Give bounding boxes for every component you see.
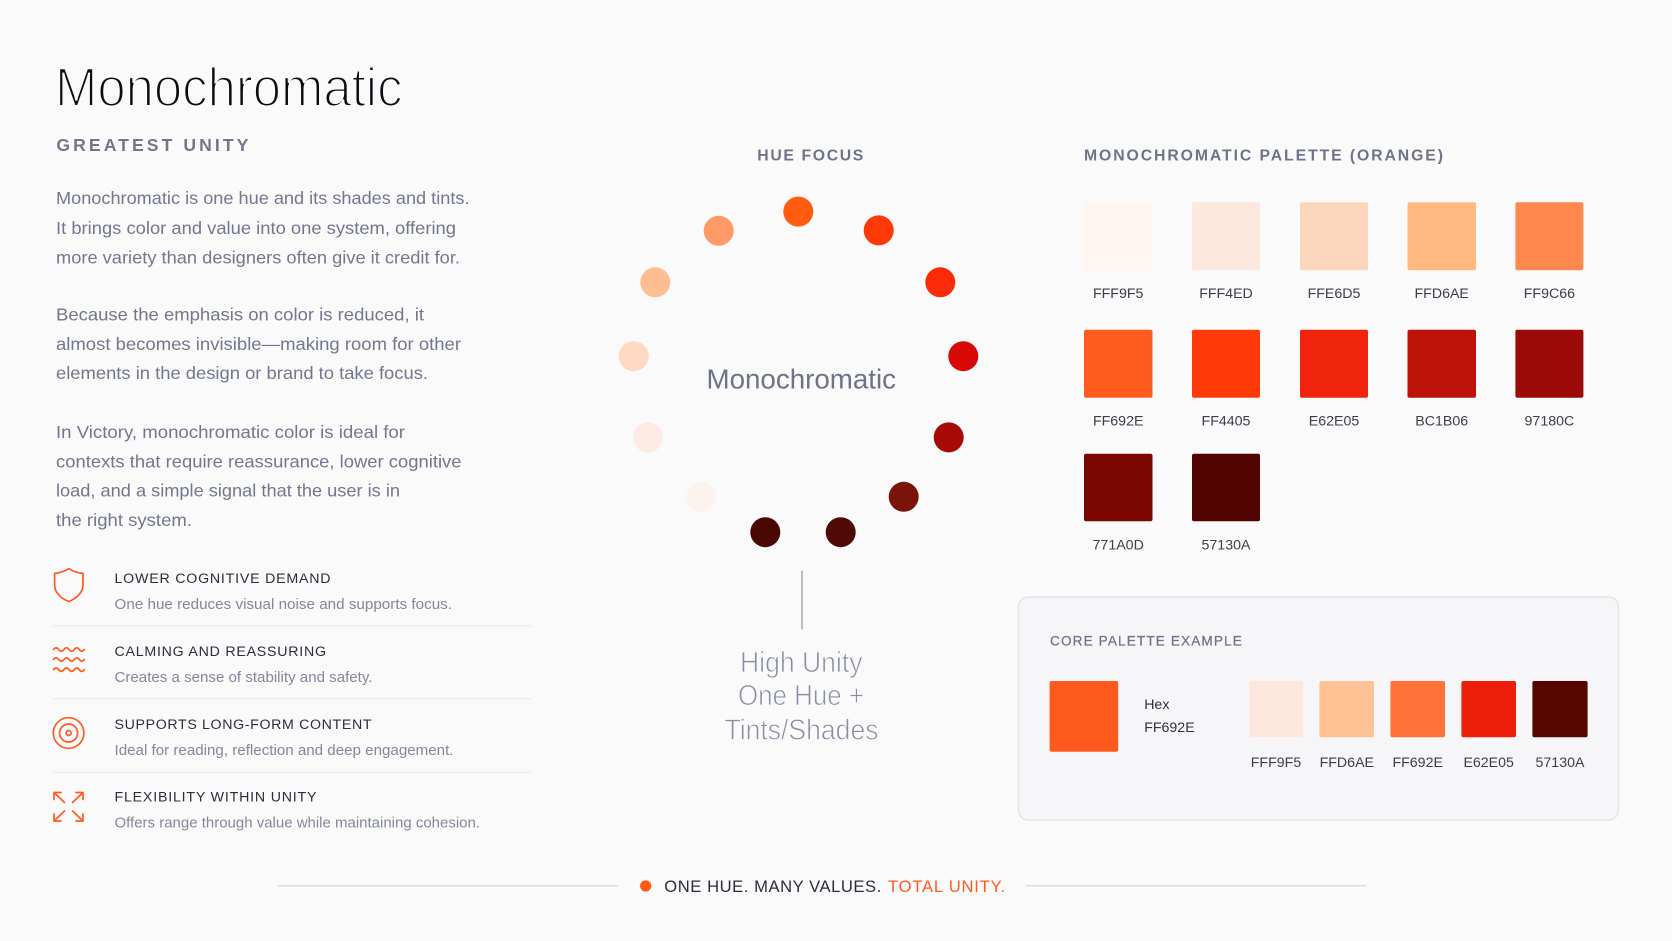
label: primary hex: Hex bbox=[1144, 697, 1169, 713]
paragraph: invisibility bbox=[56, 305, 461, 383]
caption: high unity bbox=[724, 647, 878, 746]
benefit: lower cognitive demand: One hue reduces visual noise and supports focus. bbox=[114, 597, 452, 613]
caption: high unity: Tints/Shades bbox=[724, 714, 878, 746]
panel: palette swatches: 771A0D bbox=[1093, 538, 1144, 554]
panel: core palette example bbox=[1018, 597, 1618, 820]
chart: hue ring bbox=[619, 197, 978, 547]
paragraph: usage in Victory: In Victory, monochromatic color is ideal for bbox=[56, 422, 405, 442]
paragraph: invisibility: Because the emphasis on color is reduced, it bbox=[56, 305, 424, 325]
heading: hue focus: HUE FOCUS bbox=[757, 148, 863, 164]
benefit: supports long-form content: Ideal for reading, reflection and deep engagement. bbox=[114, 743, 454, 759]
swatch row: core palette: E62E05 bbox=[1463, 755, 1514, 771]
panel: palette swatches: FFD6AE bbox=[1414, 286, 1469, 302]
swatch row: core palette: FF692E bbox=[1392, 755, 1443, 771]
benefit: flexibility within unity bbox=[54, 790, 480, 832]
swatch row: core palette: FFD6AE bbox=[1320, 755, 1374, 771]
paragraph: usage in Victory bbox=[56, 422, 462, 530]
paragraph: definition: Monochromatic is one hue and its shades and tints. bbox=[56, 188, 469, 208]
paragraph: usage in Victory: load, and a simple signal that the user is in bbox=[56, 481, 400, 501]
panel: palette swatches: E62E05 bbox=[1309, 414, 1359, 430]
footer text: ONE HUE. MANY VALUES. bbox=[664, 877, 881, 896]
swatch row: core palette bbox=[1249, 681, 1588, 771]
title: Monochromatic bbox=[55, 56, 402, 118]
panel: palette swatches: BC1B06 bbox=[1415, 414, 1468, 430]
panel: palette swatches: FFE6D5 bbox=[1308, 286, 1361, 302]
swatch: primary hue bbox=[1050, 681, 1118, 752]
label: primary hex bbox=[1144, 697, 1195, 736]
panel: palette swatches: FF692E bbox=[1093, 414, 1143, 430]
benefit: supports long-form content: SUPPORTS LONG-FORM CONTENT bbox=[114, 717, 372, 733]
paragraph: invisibility: almost becomes invisible—making room for other bbox=[56, 334, 461, 354]
benefit: calming and reassuring bbox=[54, 644, 372, 686]
panel: palette swatches: FF4405 bbox=[1202, 414, 1251, 430]
swatch row: core palette: 57130A bbox=[1536, 755, 1585, 771]
heading: palette: MONOCHROMATIC PALETTE (ORANGE) bbox=[1084, 148, 1443, 165]
connector line bbox=[801, 571, 803, 629]
benefits list bbox=[53, 569, 531, 832]
paragraph: invisibility: elements in the design or brand to take focus. bbox=[56, 363, 428, 383]
footer tagline bbox=[277, 877, 1366, 896]
icon: target bbox=[53, 718, 84, 748]
icon: shield bbox=[55, 569, 83, 602]
panel: palette swatches: 57130A bbox=[1202, 538, 1251, 554]
text block: body copy bbox=[56, 188, 469, 530]
paragraph: usage in Victory: the right system. bbox=[56, 510, 192, 530]
paragraph: definition: It brings color and value into one system, offering bbox=[56, 218, 456, 238]
label: primary hex: FF692E bbox=[1144, 720, 1195, 736]
panel: palette swatches: FF9C66 bbox=[1524, 286, 1575, 302]
benefit: lower cognitive demand: LOWER COGNITIVE DEMAND bbox=[114, 571, 330, 587]
benefit: calming and reassuring: CALMING AND REASSURING bbox=[114, 644, 326, 660]
caption: high unity: One Hue + bbox=[738, 680, 864, 712]
benefit: flexibility within unity: Offers range through value while maintaining cohesion. bbox=[114, 816, 480, 832]
footer accent text: TOTAL UNITY. bbox=[888, 877, 1005, 896]
panel: palette swatches bbox=[1084, 202, 1583, 554]
icon: expand arrows bbox=[54, 792, 83, 821]
panel: palette swatches: 97180C bbox=[1525, 414, 1574, 430]
paragraph: usage in Victory: contexts that require reassurance, lower cognitive bbox=[56, 451, 462, 471]
paragraph: definition bbox=[56, 188, 469, 268]
icon: waves bbox=[54, 648, 84, 671]
panel: palette swatches: FFF4ED bbox=[1199, 286, 1253, 302]
swatch row: core palette: FFF9F5 bbox=[1251, 755, 1301, 771]
benefit: supports long-form content bbox=[53, 717, 454, 759]
footer dot bbox=[640, 880, 651, 892]
heading: core palette: CORE PALETTE EXAMPLE bbox=[1050, 633, 1242, 648]
benefit: flexibility within unity: FLEXIBILITY WITHIN UNITY bbox=[114, 790, 317, 806]
benefit: lower cognitive demand bbox=[55, 569, 452, 613]
ring centre label: Monochromatic bbox=[706, 363, 896, 394]
benefit: calming and reassuring: Creates a sense of stability and safety. bbox=[114, 670, 372, 686]
paragraph: definition: more variety than designers often give it credit for. bbox=[56, 248, 460, 268]
subtitle: GREATEST UNITY bbox=[56, 135, 249, 155]
caption: high unity: High Unity bbox=[740, 647, 863, 679]
panel: palette swatches: FFF9F5 bbox=[1093, 286, 1144, 302]
